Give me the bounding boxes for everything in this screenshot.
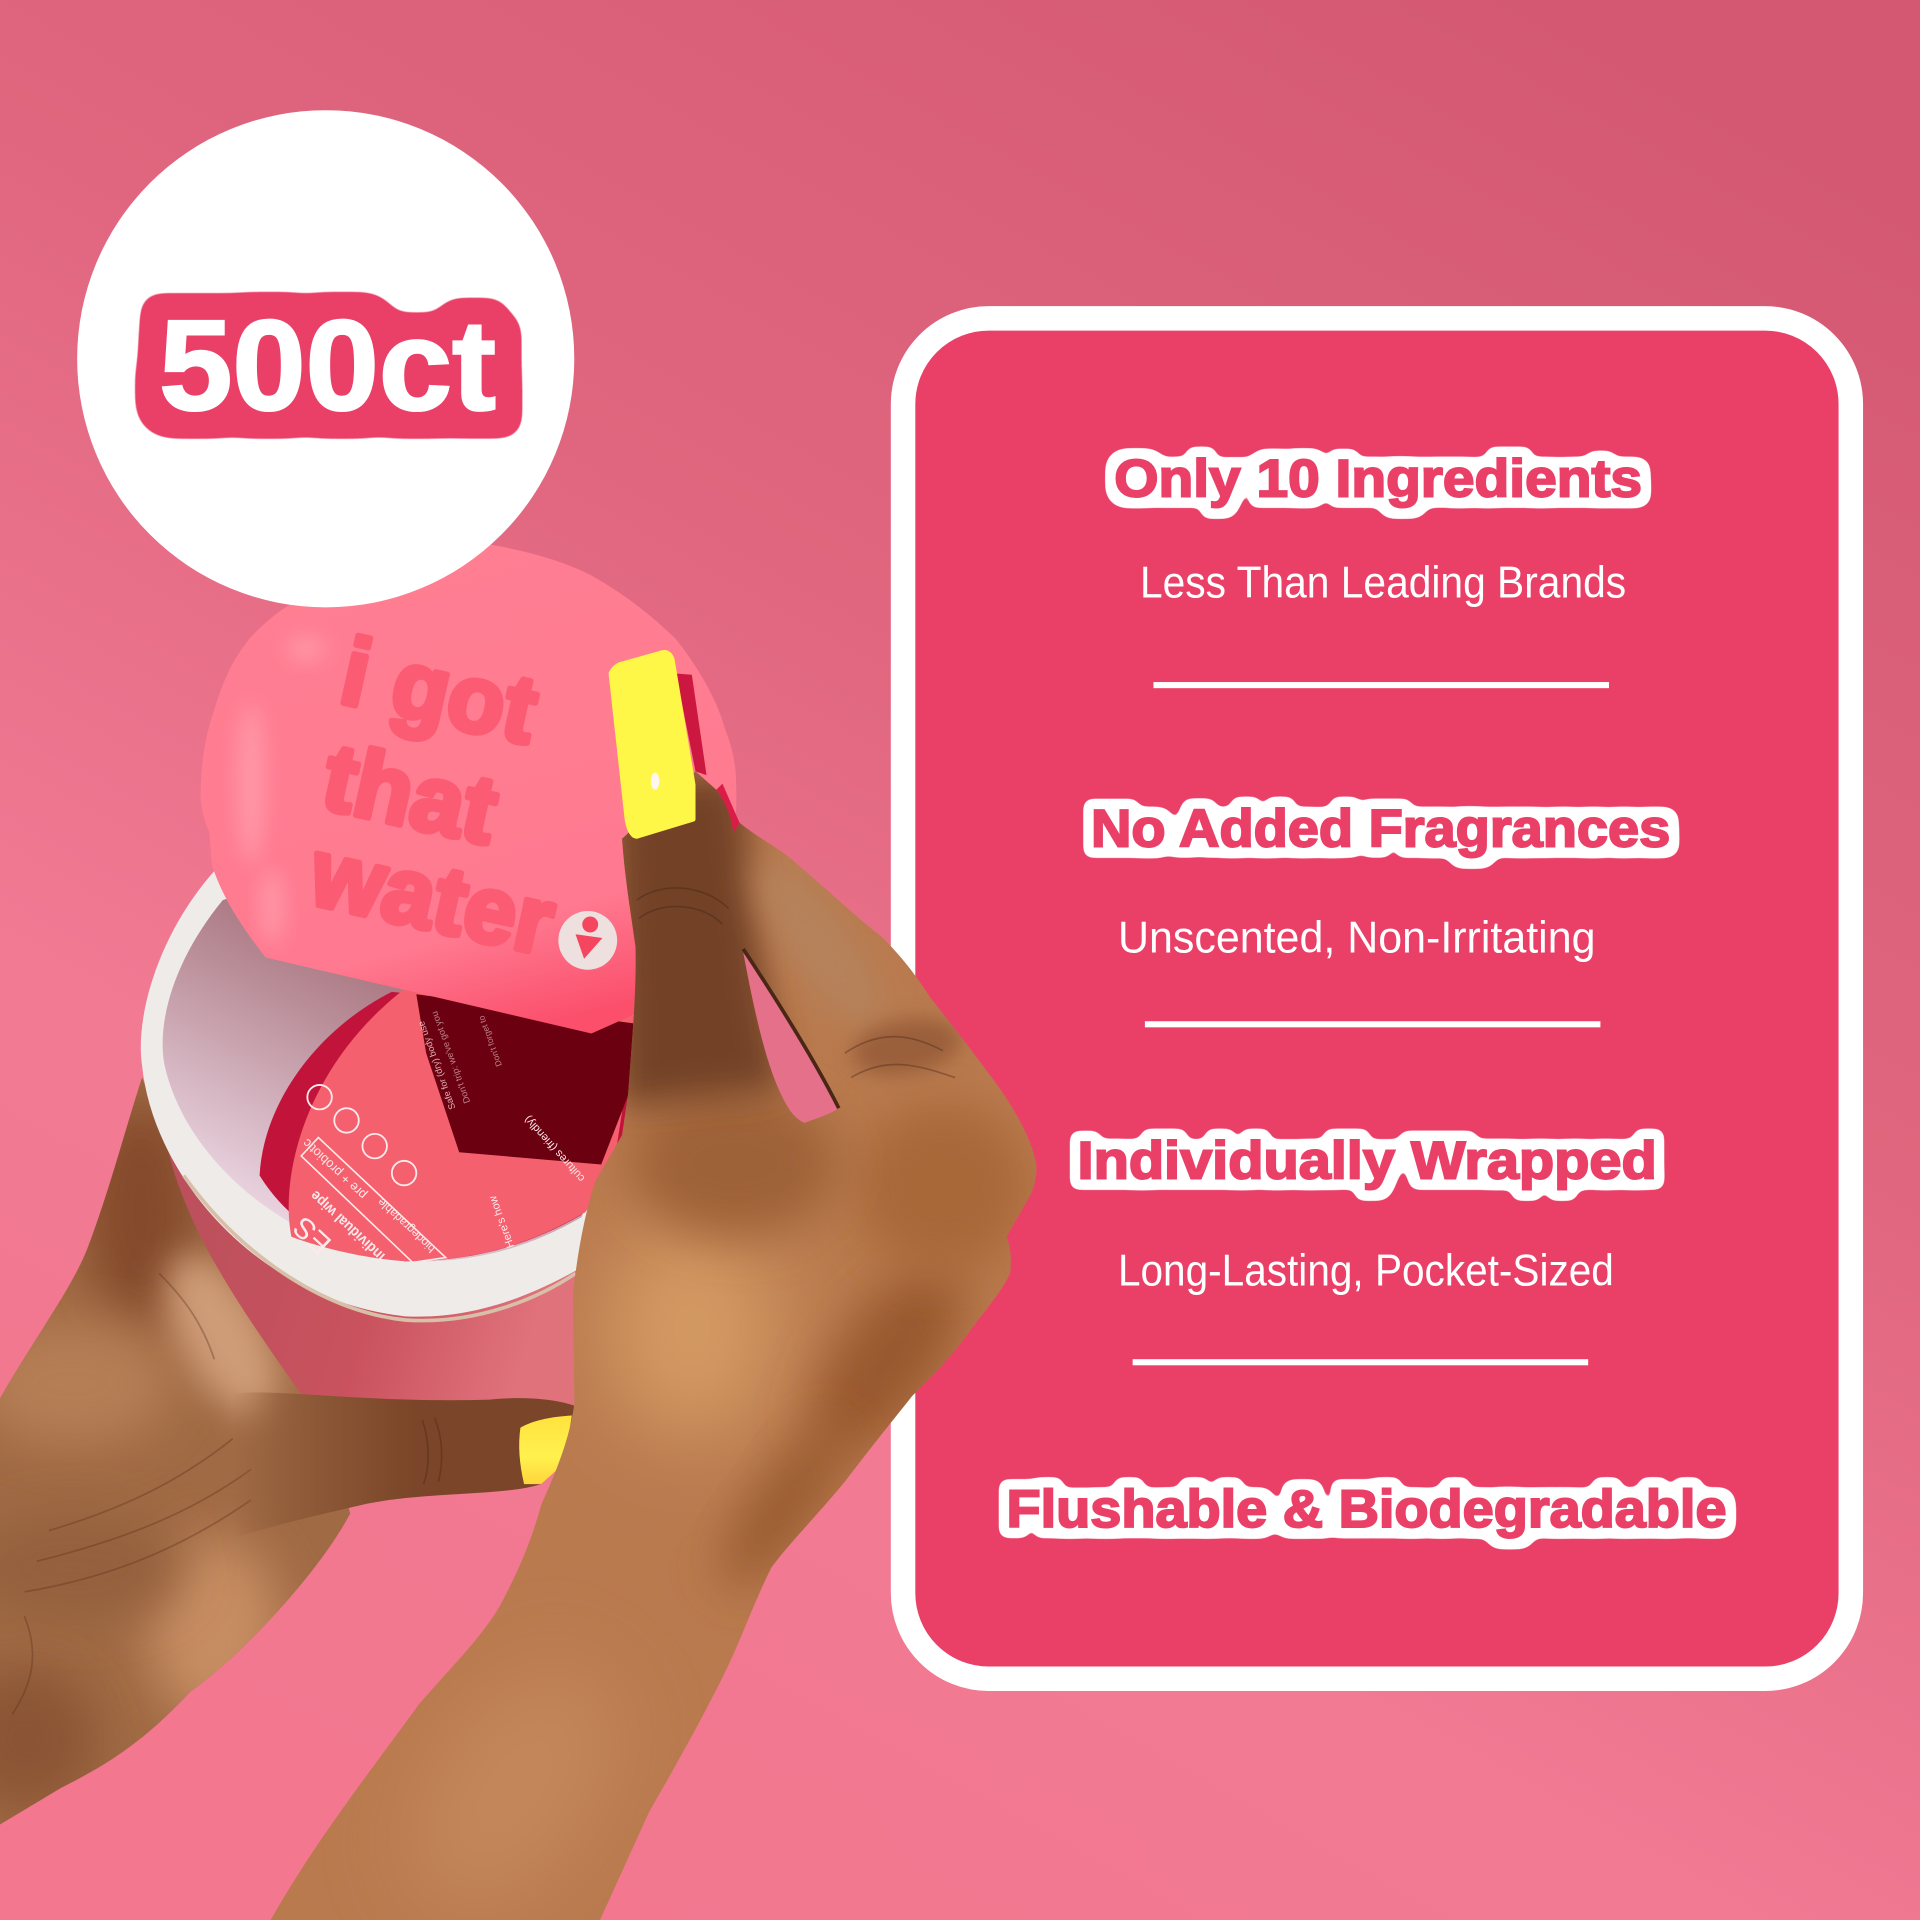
- yellow fingernail: [611, 652, 693, 836]
- wipe label small print: Safe for (dry) body use: [416, 1020, 457, 1111]
- packet slogan: i got: [332, 619, 546, 765]
- wipe label small print: biodegradable: [375, 1195, 438, 1255]
- thumb knuckle creases: [422, 1418, 442, 1484]
- left hand skin creases: [12, 1273, 251, 1714]
- card frame: [903, 318, 1851, 1679]
- thumb nail: [519, 1416, 572, 1484]
- cup interior: [163, 857, 637, 1261]
- packet edge shadow beside finger: [716, 784, 740, 833]
- wipe label small print: Don't forget to: [476, 1014, 504, 1068]
- left hand palm holding the cup: [0, 1078, 350, 1824]
- cup outer body: [165, 1139, 576, 1408]
- cup rim: [141, 857, 637, 1317]
- left hand thumb and nail: [233, 1392, 574, 1538]
- packet slogan: water: [301, 819, 564, 976]
- benefit 4 heading: Flushable & Biodegradable: [1007, 1480, 1727, 1539]
- badge: 500 count circle: [77, 110, 574, 607]
- benefit 1 heading: Only 10 Ingredients: [1114, 450, 1642, 509]
- packet logo: [558, 911, 617, 970]
- benefit 3 subtext: Long-Lasting, Pocket-Sized: [1118, 1247, 1614, 1296]
- packet slogan: that: [314, 724, 507, 865]
- wipe label icons: [307, 1085, 416, 1185]
- packet slogan: [301, 619, 564, 976]
- wipe label small print: [287, 1010, 588, 1264]
- wipe label small print: Here's how: [487, 1194, 517, 1250]
- wipe packet: [201, 544, 736, 1033]
- wipe label small print: Don't trip: we've got you: [429, 1010, 472, 1105]
- right hand and forearm: [271, 652, 1036, 1920]
- shadow behind fingernail: [676, 673, 707, 775]
- cup: [141, 857, 637, 1408]
- wipe label small print: ES: [287, 1210, 338, 1261]
- gap between finger and thumb: [743, 953, 839, 1123]
- wipe label small print: individual wipe: [308, 1187, 388, 1264]
- wipe label small print: cultures (friendly): [522, 1113, 588, 1184]
- shadow line beside the gap: [743, 949, 839, 1108]
- wipe label box: [301, 1138, 446, 1262]
- wipe stack inside the cup: [260, 992, 637, 1261]
- shadow on wipe stack: [416, 994, 636, 1164]
- benefit 2 heading: No Added Fragrances: [1091, 800, 1670, 859]
- benefit 3 heading: Individually Wrapped: [1078, 1132, 1657, 1191]
- benefit 2 subtext: Unscented, Non-Irritating: [1118, 914, 1596, 963]
- packet creases: [236, 637, 326, 943]
- benefit 1 subtext: Less Than Leading Brands: [1140, 559, 1626, 608]
- wipe label small print: pre + probiotic: [299, 1136, 369, 1203]
- badge label: 500ct: [159, 295, 496, 438]
- nail highlight: [651, 773, 659, 790]
- finger knuckle and hand creases: [637, 888, 955, 1078]
- panel: product benefits card: [903, 318, 1851, 1679]
